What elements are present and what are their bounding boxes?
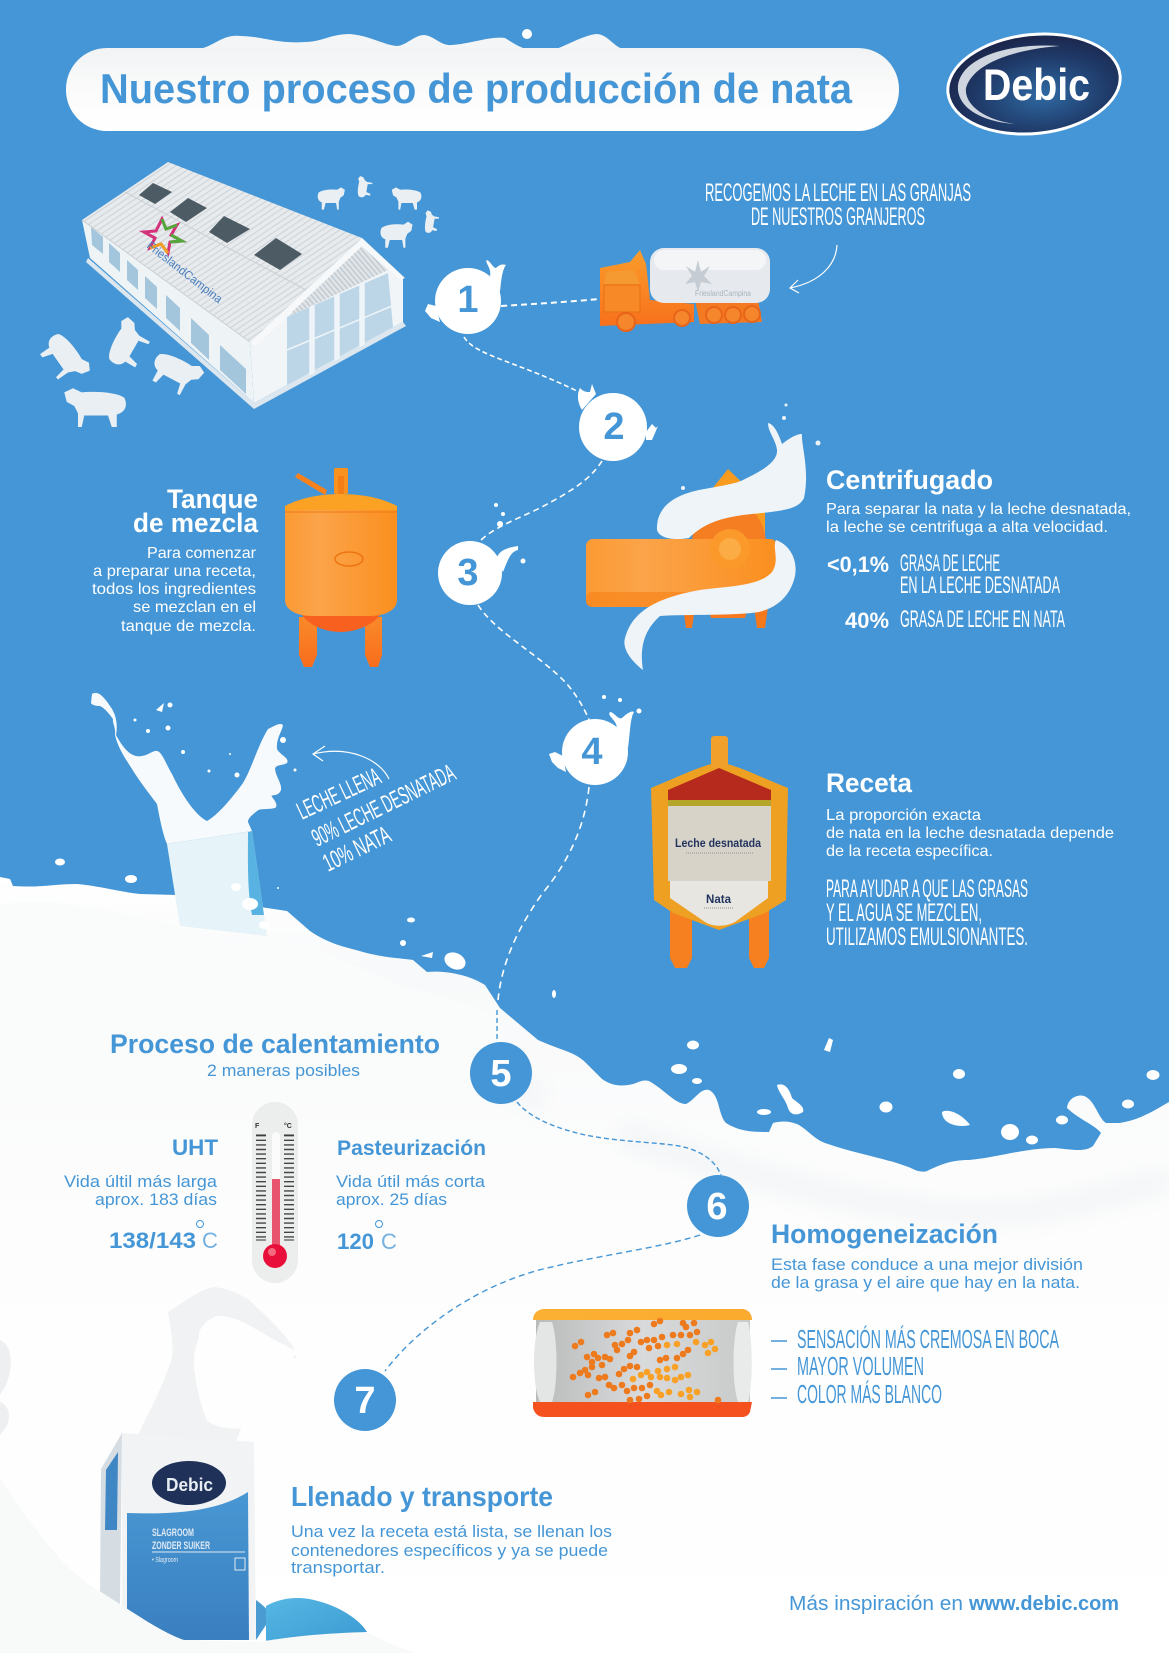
- step 7: 7: [354, 1380, 376, 1422]
- benefits list: MAYOR VOLUMEN: [797, 1351, 924, 1381]
- package side: [100, 1433, 122, 1606]
- heading: Tanque: [167, 484, 258, 514]
- soft milk shading: [0, 954, 1169, 1215]
- column: UHT: aprox. 183 días: [95, 1190, 217, 1209]
- cows: [36, 176, 440, 427]
- heading: Homogeneización: [771, 1219, 998, 1249]
- panel: homogenization: de la grasa y el aire que hay en la nata.: [771, 1273, 1080, 1292]
- heading: Receta: [826, 768, 913, 798]
- subheading: 2 maneras posibles: [207, 1061, 360, 1080]
- truck: [600, 248, 770, 331]
- roof: [82, 162, 362, 342]
- glass facade: [287, 273, 393, 385]
- icon: cream package: [100, 1433, 256, 1640]
- arrow to truck: [790, 245, 837, 293]
- tank: [650, 248, 770, 303]
- step 7: [334, 1369, 396, 1431]
- benefits list: [771, 1324, 1059, 1409]
- icon: milk swirl: [624, 404, 820, 670]
- icon: milk splash: [91, 693, 288, 844]
- description: la leche se centrifuga a alta velocidad.: [826, 519, 1108, 536]
- milk in front of glass: [0, 902, 500, 1100]
- column: UHT: UHT: [172, 1135, 219, 1160]
- title banner: [66, 29, 899, 131]
- cab: [600, 250, 694, 326]
- step 5: 5: [490, 1053, 512, 1095]
- text: milk collection: [705, 179, 971, 231]
- logo: Debic: Debic: [983, 59, 1090, 110]
- icon: centrifuge: [586, 469, 777, 628]
- dashed connector: 5 to 6: [517, 1102, 721, 1175]
- panel: filling and transport: transportar.: [291, 1558, 385, 1577]
- icon: recipe tank: [651, 736, 788, 968]
- column: UHT: 138/143: [109, 1228, 196, 1253]
- foreground milk wave: [0, 1479, 415, 1653]
- building side wall: [82, 220, 254, 403]
- description: todos los ingredientes: [92, 581, 256, 598]
- column: UHT: [64, 1135, 219, 1253]
- heading: Proceso de calentamiento: [110, 1029, 440, 1059]
- droplets: [55, 858, 1160, 1144]
- dashed connector: 1 to truck: [501, 299, 600, 306]
- description: de la receta específica.: [826, 843, 993, 860]
- description: La proporción exacta: [826, 807, 981, 824]
- note: emulsifiers: Y EL AGUA SE MEZCLEN,: [826, 899, 982, 927]
- text: whole milk composition: 10% NATA: [318, 821, 396, 877]
- wheels: [617, 306, 760, 331]
- heading: Centrifugado: [826, 465, 993, 495]
- dashed connector: 1 to 2: [464, 337, 585, 395]
- gable: [290, 243, 388, 316]
- description: [826, 501, 1131, 536]
- glass with milk splash: [0, 693, 500, 1100]
- heading: [133, 484, 259, 538]
- step 1: [425, 260, 506, 334]
- icon: mixing tank: [285, 468, 397, 667]
- column: UHT: Vida últil más larga: [64, 1172, 218, 1191]
- step 2: 2: [603, 406, 625, 448]
- text: whole milk composition: [293, 759, 460, 877]
- benefits list: COLOR MÁS BLANCO: [797, 1379, 942, 1409]
- column: pasteurization: aprox. 25 días: [336, 1190, 447, 1209]
- icon: milk splash over package: [138, 1287, 296, 1442]
- stat: under 0,1%: GRASA DE LECHE: [900, 550, 1000, 577]
- step circles 1 to 4: [425, 260, 658, 785]
- description: de nata en la leche desnatada depende: [826, 825, 1114, 842]
- left milk wisps: [0, 1340, 11, 1435]
- step 4: [549, 695, 642, 785]
- dashed connector: 3 to 4: [478, 605, 589, 720]
- description: tanque de mezcla.: [121, 618, 256, 635]
- column: pasteurization: Pasteurización: [337, 1137, 486, 1160]
- description: Para comenzar: [147, 545, 257, 562]
- label: leche desnatada: Leche desnatada: [675, 836, 761, 850]
- package front: [122, 1433, 256, 1640]
- stat: under 0,1%: [827, 550, 1060, 599]
- step 3: 3: [457, 552, 479, 594]
- description: se mezclan en el: [133, 599, 256, 616]
- column: pasteurization: Vida útil más corta: [336, 1172, 486, 1191]
- step 5: [470, 1042, 532, 1104]
- column: pasteurization: 120: [337, 1229, 374, 1254]
- farm building: [82, 162, 406, 409]
- description: [826, 807, 1114, 860]
- step 1: 1: [457, 279, 479, 321]
- side windows: [91, 227, 246, 394]
- step 4: 4: [581, 731, 603, 773]
- package logo: [152, 1461, 226, 1505]
- icon: thermometer: °C: [284, 1122, 292, 1130]
- FrieslandCampina logo: FrieslandCampina: [144, 238, 226, 306]
- logo: Debic: [941, 24, 1127, 144]
- step 6: [687, 1175, 749, 1237]
- stat: 40%: 40%: [845, 608, 889, 633]
- package label: ZONDER SUIKER: [152, 1540, 210, 1552]
- icon: blue dome: [256, 1598, 367, 1642]
- heading: de mezcla: [133, 508, 259, 538]
- building front wall: [250, 238, 403, 403]
- panel: homogenization: [771, 1219, 1083, 1409]
- stat: 40%: [845, 606, 1065, 633]
- package label: SLAGROOM: [152, 1527, 194, 1539]
- panel: filling and transport: [291, 1481, 612, 1577]
- skylights: [139, 183, 302, 270]
- step 3: [438, 503, 526, 605]
- description: [92, 545, 257, 635]
- description: Una vez la receta está lista, se llenan los: [291, 1522, 612, 1541]
- stat: under 0,1%: <0,1%: [827, 552, 889, 577]
- step circles 5 to 7: [334, 1042, 749, 1431]
- dashed connector: 4 to 5 on milk: [496, 1010, 498, 1042]
- panel: filling and transport: contenedores específicos y ya se puede: [291, 1541, 608, 1560]
- dashed connector: 2 to 3: [478, 461, 602, 543]
- package logo: Debic: [166, 1475, 213, 1495]
- column: UHT: C: [202, 1228, 218, 1253]
- text: whole milk composition: 90% LECHE DESNATADA: [307, 759, 460, 852]
- icon: glass: [167, 831, 267, 936]
- label: nata: Nata: [706, 892, 731, 906]
- panel: heating process: [64, 1029, 486, 1283]
- arrow to glass: [313, 746, 389, 779]
- package label: • Slagroom: [152, 1557, 178, 1564]
- column: pasteurization: [336, 1137, 486, 1254]
- footer: [789, 1593, 1119, 1615]
- text: milk collection: DE NUESTROS GRANJEROS: [751, 203, 925, 231]
- column: pasteurization: C: [381, 1229, 397, 1254]
- note: emulsifiers: [826, 875, 1028, 951]
- panel: centrifuge: [586, 404, 1131, 670]
- tank star: [685, 260, 712, 292]
- panel: recipe: [651, 736, 1114, 968]
- truck: FrieslandCampina: [695, 289, 751, 298]
- chassis: [695, 300, 762, 324]
- orange fat globules: [570, 1318, 721, 1403]
- panel: mixing tank: [92, 468, 397, 667]
- footer: www.debic.com: [968, 1593, 1119, 1615]
- package label: [152, 1527, 245, 1570]
- step 2: [578, 384, 658, 461]
- dashed connector: 6 to 7: [385, 1235, 700, 1371]
- building base: [86, 258, 406, 409]
- title: Nuestro proceso de producción de nata: [100, 65, 853, 112]
- icon: homogenizer cross-section: [533, 1309, 752, 1417]
- description: Esta fase conduce a una mejor división: [771, 1255, 1083, 1274]
- footer: Más inspiración en: [789, 1593, 963, 1615]
- milk wave: [0, 858, 1169, 1653]
- description: Para separar la nata y la leche desnatada,: [826, 501, 1131, 518]
- heading: Llenado y transporte: [291, 1481, 553, 1512]
- dashed connector: 4 to 5: [498, 787, 589, 1000]
- icon: thermometer: F: [255, 1123, 260, 1130]
- description: a preparar una receta,: [93, 563, 256, 580]
- text: whole milk composition: LECHE LLENA: [293, 762, 385, 825]
- icon: thermometer: [252, 1102, 298, 1283]
- step 6: 6: [706, 1186, 728, 1228]
